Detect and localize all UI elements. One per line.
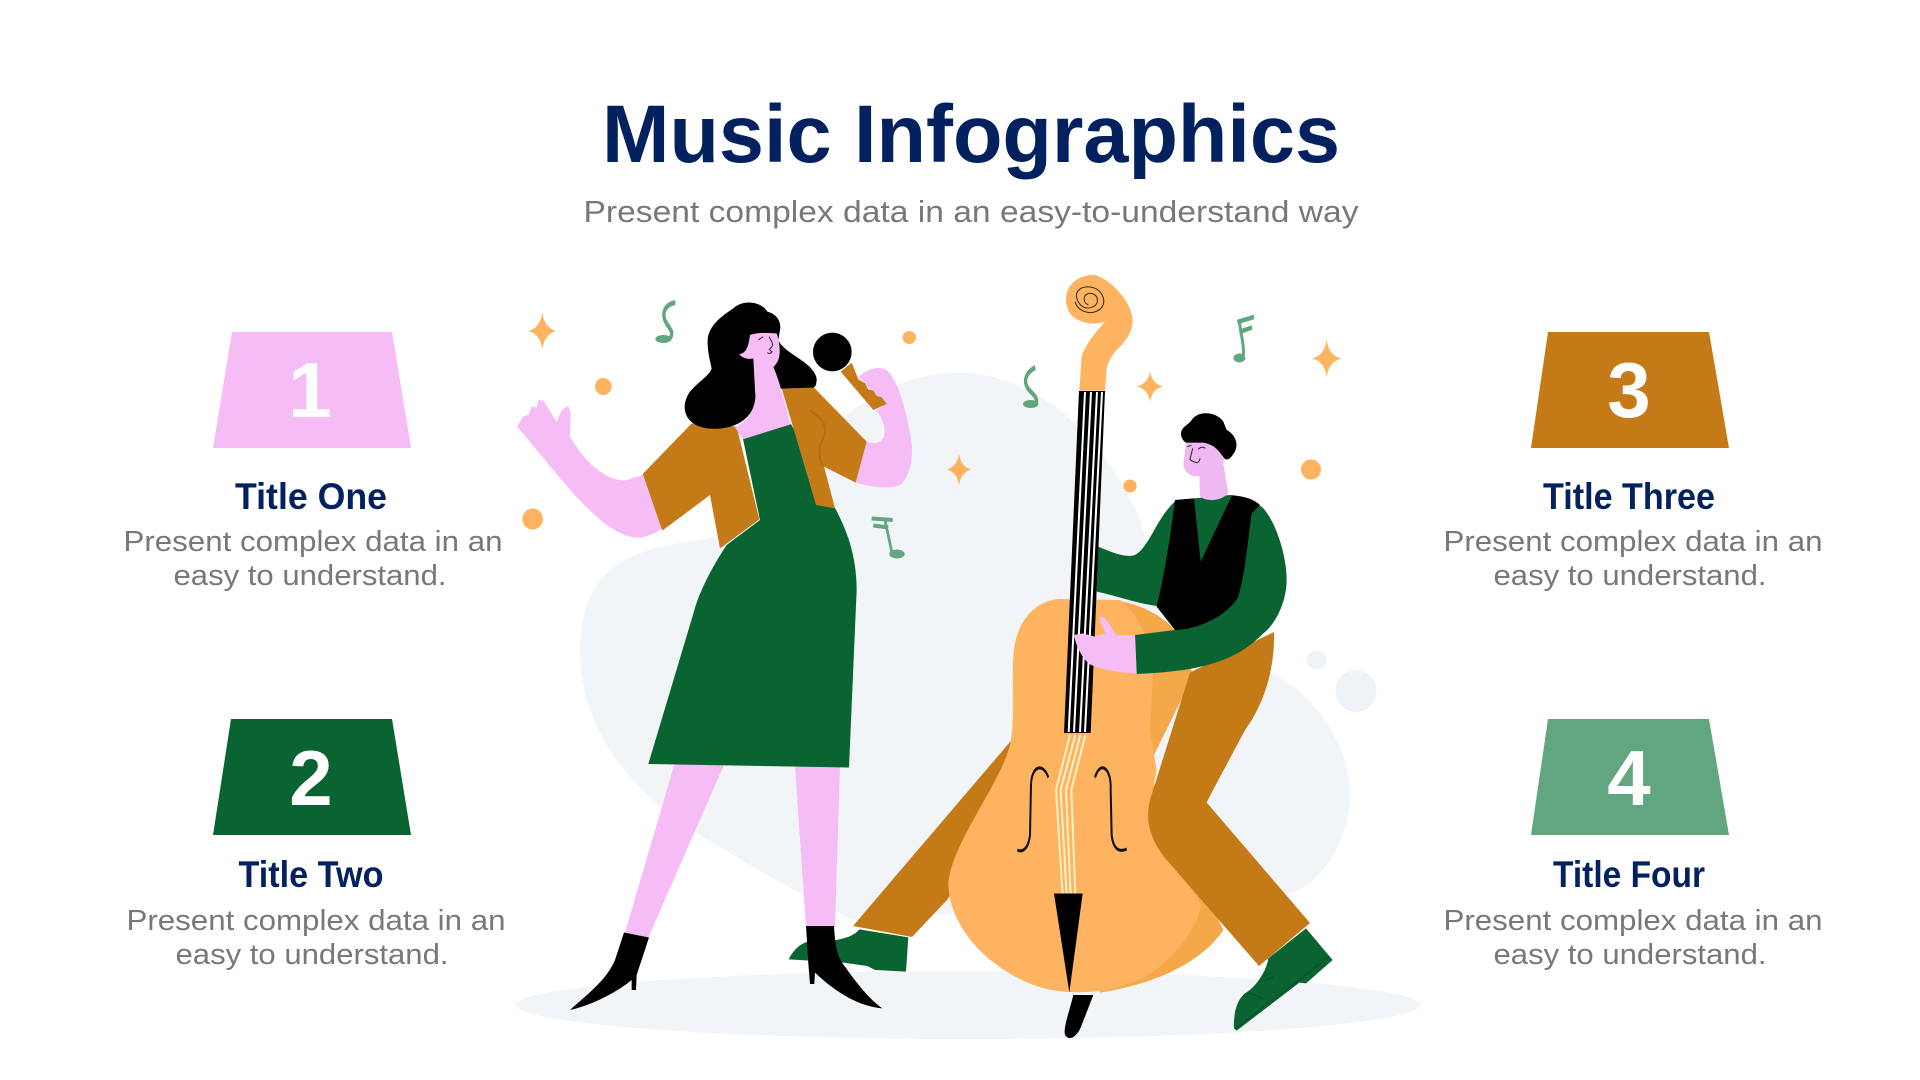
text: description two: Present complex data in an bbox=[126, 905, 506, 937]
illustration: singer bbox=[517, 302, 912, 1010]
number badge one bbox=[213, 332, 411, 448]
bass body bbox=[948, 599, 1202, 992]
dress bbox=[648, 424, 857, 768]
panel: item one bbox=[124, 332, 502, 592]
right boot bbox=[806, 926, 882, 1008]
title: Music Infographics bbox=[602, 89, 1340, 180]
panel: item two bbox=[126, 719, 506, 971]
text: description four: easy to understand. bbox=[1494, 939, 1766, 971]
vest bbox=[1157, 496, 1260, 630]
fingerboard strings bbox=[1069, 392, 1102, 732]
illustration: left sparkles and notes bbox=[522, 302, 971, 558]
number badge two bbox=[213, 719, 411, 835]
front shoe bbox=[1234, 928, 1333, 1031]
number badge four: 4 bbox=[1607, 734, 1651, 822]
illustration: bassist and double bass bbox=[788, 275, 1333, 1038]
bass shaded side bbox=[1100, 600, 1223, 992]
microphone head bbox=[813, 333, 852, 371]
number badge four bbox=[1531, 719, 1729, 835]
sweater bbox=[1097, 495, 1287, 674]
number badge three: 3 bbox=[1607, 346, 1651, 434]
left boot bbox=[570, 932, 649, 1010]
hand bbox=[1074, 617, 1137, 673]
right leg bbox=[795, 765, 840, 927]
end pin bbox=[1065, 995, 1093, 1038]
text: description three: easy to understand. bbox=[1494, 560, 1766, 592]
hair bbox=[685, 302, 817, 429]
illustration: ground shadow bbox=[516, 971, 1420, 1039]
raised arm bbox=[856, 368, 912, 488]
bridge strings bbox=[1056, 735, 1085, 895]
text: description one: Present complex data in an bbox=[124, 526, 502, 558]
illustration: background blob bbox=[580, 372, 1350, 920]
back leg bbox=[853, 740, 1033, 937]
number badge three bbox=[1531, 332, 1729, 448]
jacket right bbox=[782, 388, 867, 508]
jacket crease bbox=[810, 411, 825, 465]
subtitle: Present complex data in an easy-to-understand way bbox=[584, 194, 1359, 229]
f-holes bbox=[1017, 768, 1127, 851]
microphone handle bbox=[841, 363, 887, 410]
heading: title four: Title Four bbox=[1553, 854, 1705, 895]
back shoe bbox=[788, 929, 908, 972]
heading: title two: Title Two bbox=[238, 854, 384, 895]
number badge one: 1 bbox=[288, 346, 332, 434]
text: description three: Present complex data in an bbox=[1444, 526, 1822, 558]
jacket left bbox=[643, 423, 759, 548]
extended arm bbox=[517, 400, 662, 538]
fingerboard bbox=[1064, 391, 1105, 733]
text: description four: Present complex data in an bbox=[1444, 905, 1822, 937]
face and chest bbox=[735, 333, 791, 439]
illustration: right sparkles, notes and dots bbox=[1023, 317, 1377, 712]
front leg bbox=[1148, 632, 1310, 966]
tailpiece bbox=[1054, 894, 1083, 992]
scroll and neck of bass bbox=[1066, 275, 1133, 391]
text: description one: easy to understand. bbox=[174, 560, 446, 592]
panel: item three bbox=[1444, 332, 1822, 592]
panel: item four bbox=[1444, 719, 1822, 971]
heading: title three: Title Three bbox=[1543, 476, 1715, 517]
face lines bbox=[758, 337, 772, 353]
left leg bbox=[625, 762, 725, 938]
head and neck bbox=[1181, 413, 1237, 500]
number badge two: 2 bbox=[289, 734, 333, 822]
text: description two: easy to understand. bbox=[176, 939, 448, 971]
heading: title one: Title One bbox=[235, 476, 387, 517]
